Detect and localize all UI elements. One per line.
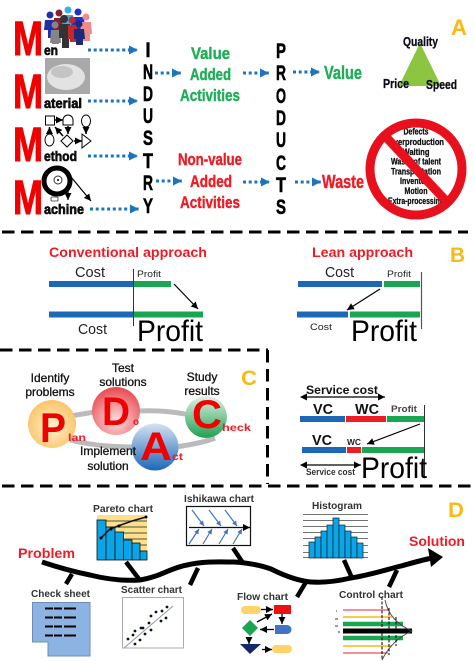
label: Machine: achine bbox=[44, 201, 84, 217]
ring connecting the PDCA circles bbox=[70, 411, 215, 447]
label: Method bbox=[13, 119, 77, 172]
arrows: flow to activities and results bbox=[155, 72, 321, 182]
triangle: quality price speed: Quality bbox=[403, 34, 439, 49]
vertical word: INDUSTRY: T bbox=[143, 150, 153, 173]
text: non-value added activities: Activities bbox=[180, 193, 240, 212]
vertical word: PRODUCTS: D bbox=[276, 107, 286, 130]
vertical word: PRODUCTS: S bbox=[276, 196, 286, 219]
prohibition sign: wastes: Defects bbox=[404, 126, 428, 136]
tool: Flow chart bbox=[237, 592, 292, 654]
chart: conventional bars bbox=[49, 264, 204, 348]
panel letter C: C bbox=[241, 367, 257, 390]
vertical word: INDUSTRY bbox=[143, 39, 153, 218]
labels: PDCA steps: Test bbox=[112, 361, 135, 375]
vertical word: INDUSTRY: S bbox=[143, 127, 153, 150]
circle: Check bbox=[185, 393, 252, 438]
label: Solution: Solution bbox=[409, 533, 465, 549]
prohibition sign: wastes: Motion bbox=[404, 186, 428, 196]
circle: Act: A bbox=[140, 425, 172, 469]
prohibition sign: wastes bbox=[370, 123, 462, 215]
panel A: lean inputs to outputs bbox=[13, 6, 467, 225]
panel B: conventional vs lean bbox=[49, 244, 465, 348]
prohibition sign: wastes: Extra-processing bbox=[388, 196, 444, 206]
label: Men: M bbox=[13, 13, 43, 66]
circle: Plan: P bbox=[40, 404, 66, 451]
chart: lean bars: Cost bbox=[325, 264, 355, 281]
divider dashes bbox=[2, 484, 474, 488]
labels: PDCA steps bbox=[25, 361, 220, 473]
circle: Do: D bbox=[102, 390, 130, 434]
circle: Plan: lan bbox=[68, 433, 86, 444]
circle: Do bbox=[92, 387, 140, 435]
tool: Control chart: Control chart bbox=[339, 590, 404, 601]
text: value added activities: Added bbox=[190, 65, 231, 84]
icon: group of people bbox=[44, 6, 92, 48]
circle: Check: C bbox=[192, 393, 222, 437]
labels: PDCA steps: Study bbox=[187, 370, 217, 384]
panel letter B: B bbox=[450, 244, 465, 267]
chart: conventional bars: Cost bbox=[75, 264, 106, 281]
triangle: quality price speed: Speed bbox=[426, 77, 457, 92]
panel letter A: A bbox=[451, 15, 467, 40]
label: Problem: Problem bbox=[18, 545, 75, 561]
tool: Histogram bbox=[303, 501, 368, 558]
chart: service cost with waste cost: VC bbox=[313, 401, 333, 418]
chart: conventional bars: Profit bbox=[137, 315, 204, 348]
tool: Histogram: Histogram bbox=[312, 501, 362, 512]
label: Men: en bbox=[44, 42, 58, 58]
tool: Ishikawa chart: Ishikawa chart bbox=[184, 494, 255, 505]
labels: PDCA steps: solution bbox=[87, 459, 129, 473]
chart: lean bars bbox=[297, 264, 422, 348]
vertical word: INDUSTRY: R bbox=[143, 172, 153, 195]
vertical word: INDUSTRY: I bbox=[146, 39, 150, 62]
chart: service cost with waste cost: Profit bbox=[391, 404, 418, 415]
chart: service cost with waste cost: Profit bbox=[361, 452, 428, 485]
label: Machine: M bbox=[13, 172, 43, 225]
text: value added activities: Value bbox=[191, 44, 230, 63]
panel C: PDCA cycle bbox=[25, 361, 257, 473]
labels: PDCA steps: results bbox=[184, 384, 220, 398]
vertical word: PRODUCTS: U bbox=[276, 129, 286, 152]
text: Value: Value bbox=[324, 63, 362, 83]
vertical word: INDUSTRY: U bbox=[143, 105, 153, 128]
text: non-value added activities: Added bbox=[190, 172, 232, 191]
vertical word: PRODUCTS: T bbox=[276, 174, 286, 197]
circle: Check: heck bbox=[222, 423, 252, 434]
icon: material sample bbox=[45, 58, 90, 94]
tool: Scatter chart: Scatter chart bbox=[121, 585, 183, 596]
prohibition sign: wastes: Transportation bbox=[391, 166, 441, 176]
tool: Pareto chart: Pareto chart bbox=[93, 504, 154, 515]
text: value added activities bbox=[180, 44, 240, 105]
tool: Pareto chart bbox=[93, 504, 154, 560]
tool: Ishikawa chart bbox=[184, 494, 255, 546]
chart: service cost with waste cost: WC bbox=[347, 438, 361, 447]
vertical word: PRODUCTS: C bbox=[276, 152, 286, 175]
vertical word: PRODUCTS bbox=[276, 40, 286, 219]
prohibition sign: wastes: Waste of talent bbox=[391, 156, 441, 166]
vertical word: INDUSTRY: Y bbox=[143, 195, 153, 218]
label: Method: ethod bbox=[44, 148, 77, 164]
triangle: quality price speed bbox=[383, 34, 457, 92]
prohibition sign: wastes: Overproduction bbox=[388, 137, 444, 147]
tool: Flow chart: Flow chart bbox=[237, 592, 289, 603]
panel C border dashes bbox=[0, 350, 268, 484]
chart: lean bars: Profit bbox=[351, 315, 418, 348]
text: non-value added activities bbox=[178, 150, 242, 212]
chart: service cost with waste cost: VC bbox=[312, 432, 332, 449]
chart: conventional bars: Profit bbox=[137, 269, 161, 280]
text: value added activities: Activities bbox=[180, 86, 240, 105]
prohibition sign: wastes: Inventory bbox=[400, 176, 432, 186]
chart: service cost with waste cost: Service cost bbox=[306, 467, 355, 477]
chart: service cost with waste cost: WC bbox=[355, 401, 379, 418]
label: Material: M bbox=[13, 66, 43, 119]
labels: PDCA steps: problems bbox=[25, 385, 75, 399]
vertical word: PRODUCTS: P bbox=[276, 40, 286, 63]
tool: Check sheet bbox=[31, 589, 91, 656]
text: Waste: Waste bbox=[322, 172, 364, 192]
circle: Act bbox=[132, 424, 184, 470]
icon: machine with pulley bbox=[44, 168, 91, 201]
text: non-value added activities: Non-value bbox=[178, 150, 242, 169]
label: Machine bbox=[13, 172, 84, 225]
label: Material bbox=[13, 66, 82, 119]
chart: service cost with waste cost bbox=[300, 383, 428, 485]
circle: Act: ct bbox=[172, 452, 184, 463]
triangle: quality price speed: Price bbox=[383, 76, 409, 91]
arrow: problem to solution path bbox=[42, 548, 443, 597]
vertical word: PRODUCTS: O bbox=[276, 85, 286, 108]
panel letter D: D bbox=[448, 499, 464, 522]
arrows: inputs to industry bbox=[88, 50, 139, 209]
circle: Do: o bbox=[133, 417, 139, 428]
chart: lean bars: Cost bbox=[310, 322, 332, 333]
chart: service cost with waste cost: Service cost bbox=[306, 383, 378, 397]
tool: Control chart bbox=[335, 590, 412, 660]
label: Material: aterial bbox=[44, 95, 82, 111]
vertical word: INDUSTRY: D bbox=[143, 83, 153, 106]
vertical word: PRODUCTS: R bbox=[276, 62, 286, 85]
panel D: problem to solution with QC tools bbox=[18, 494, 465, 660]
heading: lean approach: Lean approach bbox=[312, 244, 413, 260]
labels: PDCA steps: Identify bbox=[31, 371, 69, 385]
divider dashes bbox=[2, 230, 468, 234]
label: Method: M bbox=[13, 119, 43, 172]
chart: lean bars: Profit bbox=[387, 269, 411, 280]
tool: Check sheet: Check sheet bbox=[31, 589, 91, 600]
vertical word: INDUSTRY: N bbox=[143, 61, 153, 84]
tool: Scatter chart bbox=[121, 585, 184, 648]
labels: PDCA steps: solutions bbox=[99, 375, 147, 389]
icon: method flow diagram bbox=[45, 115, 91, 148]
chart: conventional bars: Cost bbox=[78, 321, 108, 338]
prohibition sign: wastes: Waiting bbox=[402, 147, 430, 157]
heading: conventional approach: Conventional approach bbox=[49, 244, 207, 260]
labels: PDCA steps: Implement bbox=[80, 444, 137, 458]
circle: Plan bbox=[28, 400, 86, 451]
